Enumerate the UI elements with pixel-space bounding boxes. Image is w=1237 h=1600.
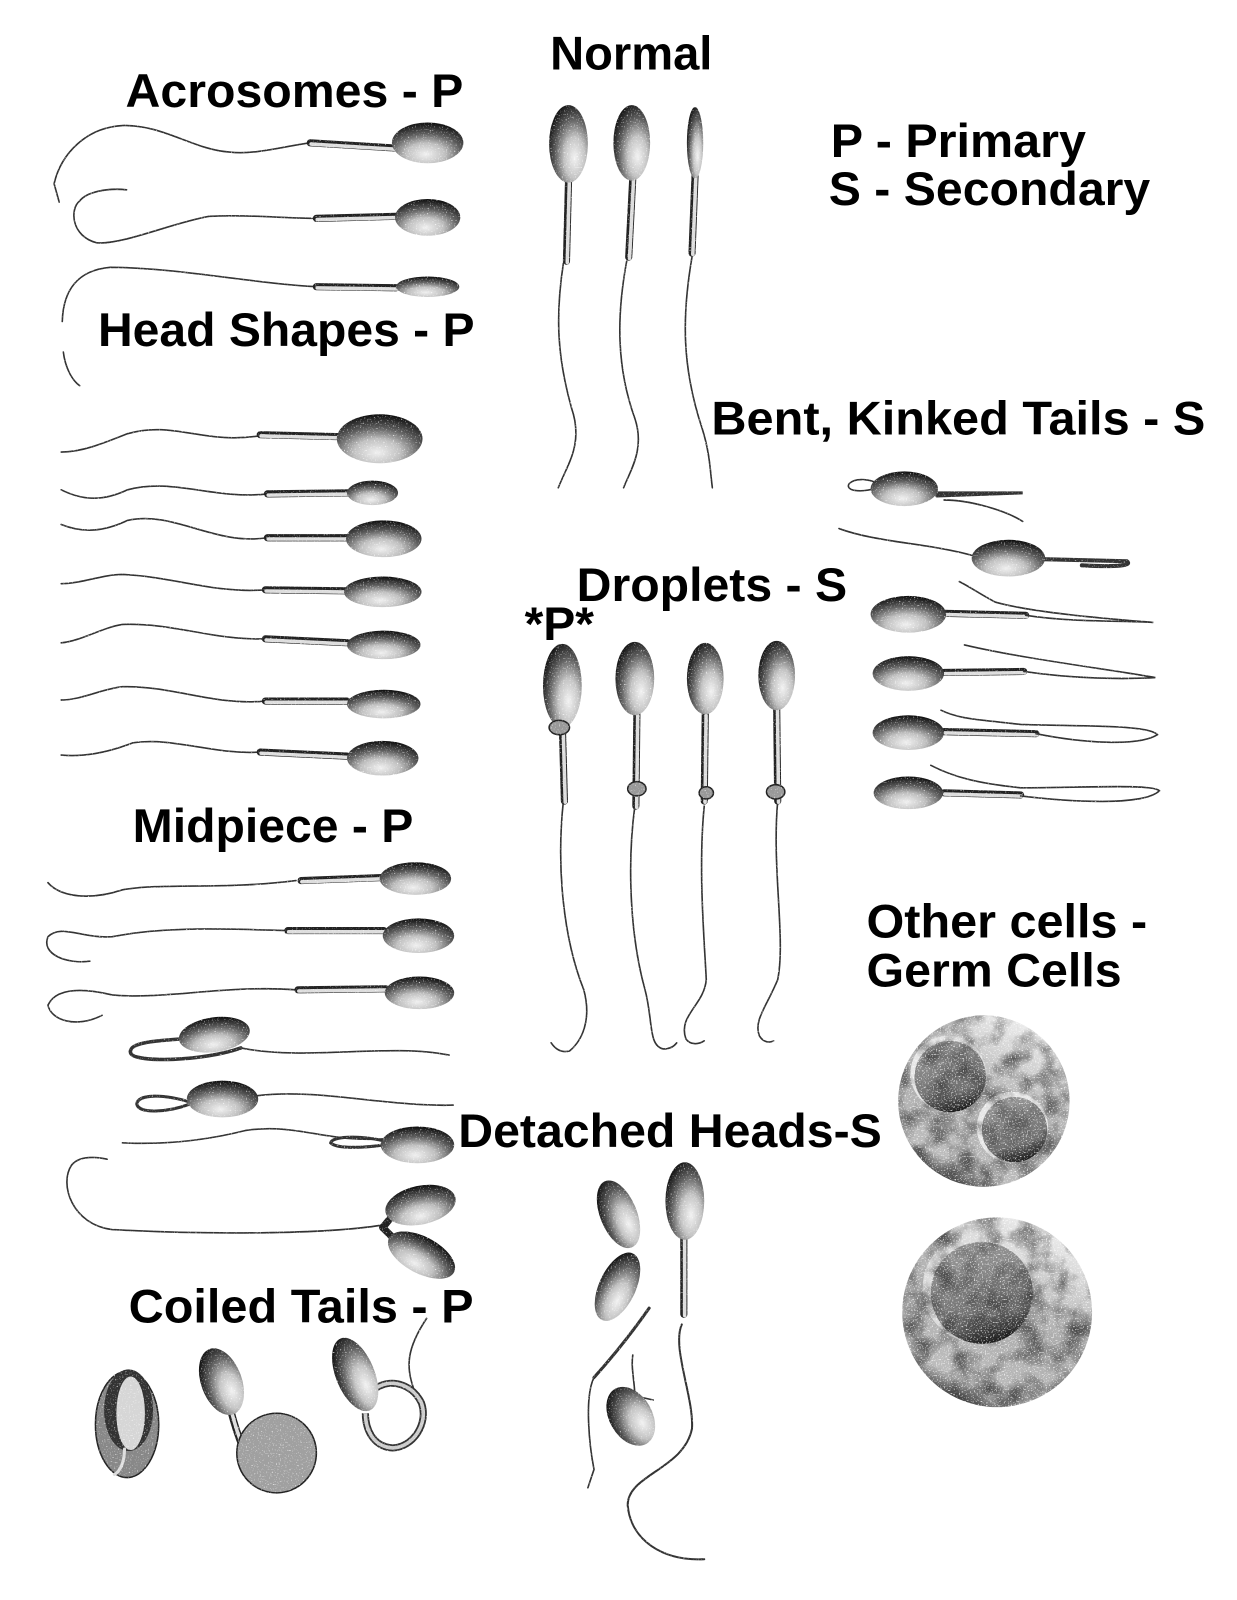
heading: Detached Heads-S: Detached Heads-S [458, 1105, 882, 1157]
illustration group: germ cells [898, 1015, 1092, 1407]
heading: Normal: Normal [550, 27, 712, 79]
illustration group: midpiece defects [47, 862, 463, 1289]
legend: primary and secondary: S - Secondary [829, 163, 1150, 215]
heading: Other cells - Germ Cells [867, 896, 1147, 997]
illustration group: normal sperm [549, 105, 712, 488]
illustration group: bent and kinked tails [839, 471, 1159, 809]
heading: Bent, Kinked Tails - S: Bent, Kinked Tails - S [711, 393, 1205, 445]
heading: Acrosomes - P: Acrosomes - P [126, 65, 463, 117]
illustration group: cytoplasmic droplets [543, 641, 795, 1052]
legend: primary and secondary: P - Primary [831, 115, 1086, 167]
heading: Other cells - Germ Cells: Other cells - [867, 896, 1147, 948]
illustration group: acrosome defects [54, 122, 463, 386]
illustration group: coiled tails [95, 1318, 427, 1493]
heading: Droplets - S: Droplets - S [577, 559, 847, 611]
illustration group: head shape defects [61, 414, 423, 776]
heading: Coiled Tails - P: Coiled Tails - P [129, 1280, 474, 1332]
illustration group: detached heads [585, 1162, 704, 1559]
heading: Other cells - Germ Cells: Germ Cells [867, 945, 1122, 997]
label: *P*: *P* [525, 598, 595, 650]
legend: primary and secondary [829, 115, 1150, 215]
heading: Head Shapes - P: Head Shapes - P [98, 304, 475, 356]
heading: Midpiece - P: Midpiece - P [133, 800, 413, 852]
